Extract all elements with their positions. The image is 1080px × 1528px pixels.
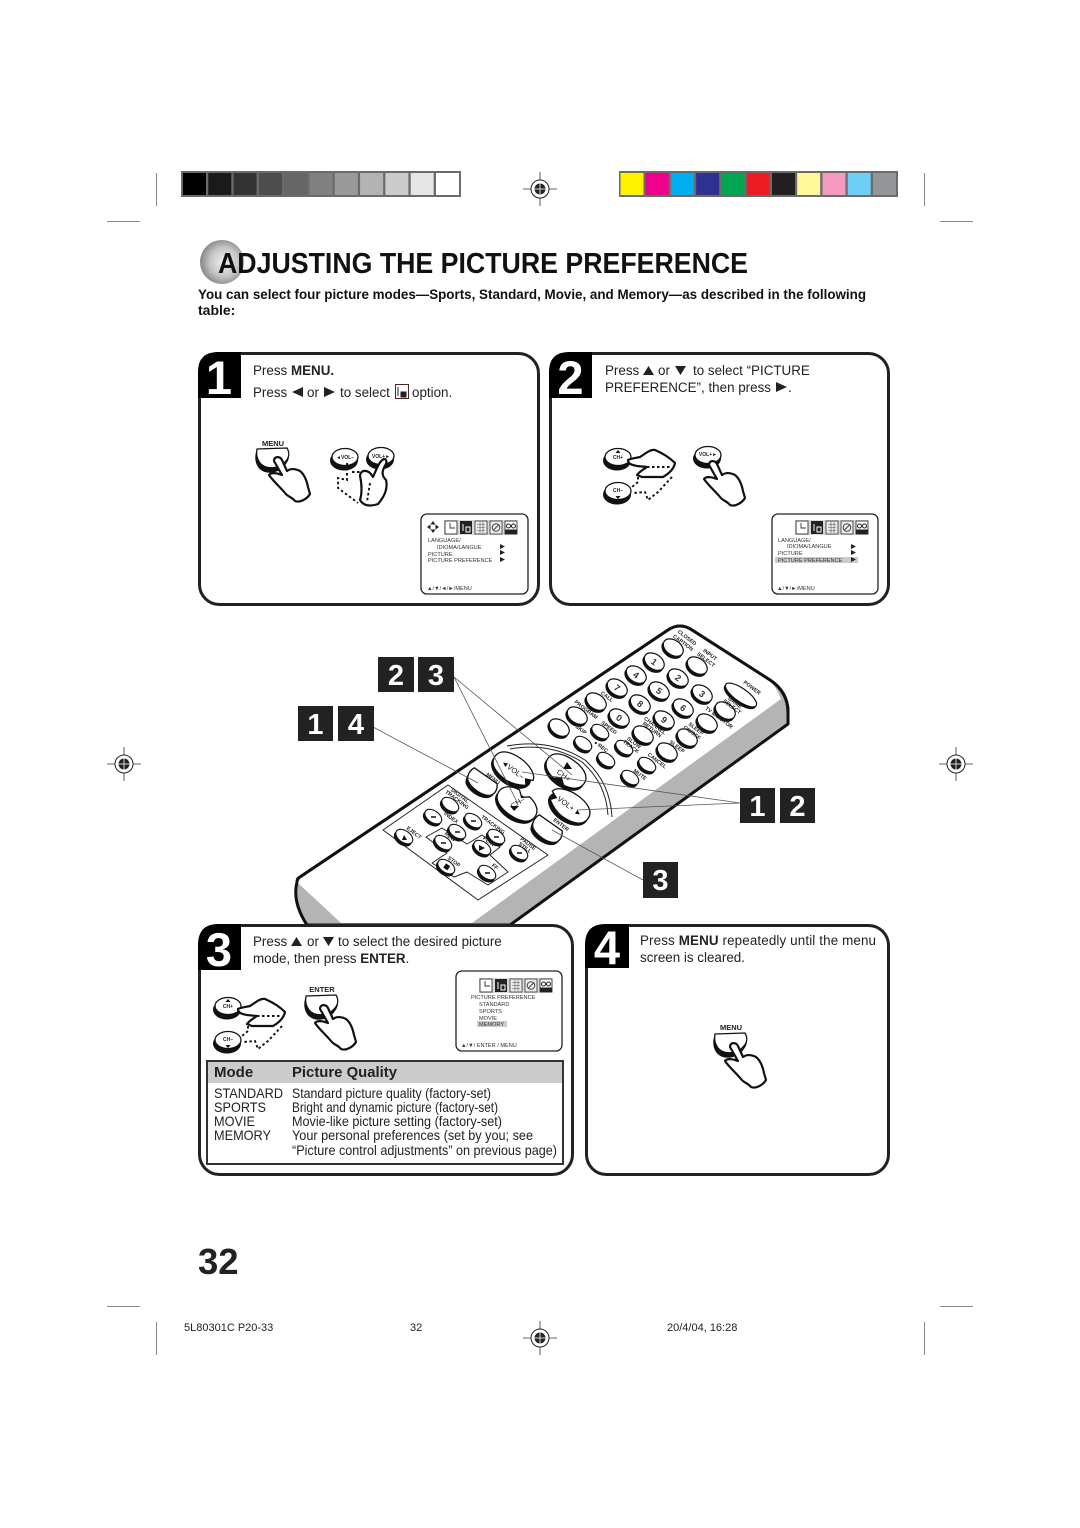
step 1 text: option. [412,385,452,400]
callout: 1 2: 2 [789,791,806,823]
step 3 text: to select the desired picture [338,934,502,949]
step 3 text: or [307,934,319,949]
button labels: TRACKING [480,814,506,836]
panel: step 2 [549,351,888,604]
menu screen 3: MEMORY [479,1022,504,1028]
panel: step 4: 4 [594,921,620,974]
step 2 text: or [658,363,670,378]
step 2 text [605,363,810,395]
button labels: MENU [485,772,501,786]
step 2 text: to select “PICTURE [693,363,810,378]
hand pressing menu: MENU [262,439,284,448]
menu screen 2 [772,514,878,594]
direction buttons: CH– [509,794,527,811]
callout: 2 3 [378,657,454,692]
button labels: STOP [446,855,461,869]
top buttons [544,635,760,791]
button labels: FF [490,863,500,872]
button labels: 8 [635,698,645,710]
menu screen 2: LANGUAGE/ [778,538,811,544]
step 1 text: Press MENU. [253,363,334,378]
panel: step 3: 3 [206,923,232,976]
callout: 3 [643,862,678,898]
step 3 text: mode, then press ENTER. [253,951,409,966]
menu screen 2: PICTURE [778,551,803,557]
button labels: 4 [631,669,641,681]
table: modes: Movie-like picture setting (factory-set) [292,1114,502,1129]
button labels: SLEEP [687,722,705,737]
process colour bar [619,171,898,197]
button labels: CHANNEL [642,716,667,737]
menu screen 1: ▲/▼/◄/►/MENU [427,586,472,592]
direction buttons: CH+ [555,767,573,784]
hand pressing menu: MENU [720,1023,742,1032]
intro text [198,286,866,318]
intro text: table: [198,302,235,318]
direction buttons: ◄VOL– [499,758,527,781]
hand pressing vol+ [693,446,745,506]
button labels: 6 [678,702,688,714]
button labels: SLEEP [668,740,686,755]
menu screen 2: PICTURE PREFERENCE [778,558,843,564]
remote body [296,626,788,925]
button labels: GAME [726,696,743,711]
menu screen 1: IDIOMA/LANGUE [437,545,482,551]
menu screen 1: LANGUAGE/ [428,538,461,544]
table: modes: MEMORY [214,1128,271,1143]
button labels: ● REC [592,740,609,754]
menu screen 2: IDIOMA/LANGUE [787,544,832,550]
menu screen 2: ▲/▼/►/MENU [777,586,815,592]
table: modes: SPORTS [214,1100,266,1115]
button labels: INDEX [442,811,459,826]
hand pressing menu [255,439,310,502]
panel: step 4 [585,921,888,1174]
menu screen 3: ▲/▼/ ENTER / MENU [461,1043,517,1049]
button labels: MUTE [632,768,648,782]
button labels: SPEED [600,720,618,736]
direction buttons: VOL+ ► [555,794,584,819]
menu screen 3: MOVIE [479,1016,497,1022]
footer slug [184,1322,737,1334]
button labels: EJECT [405,826,423,841]
menu screen 3: SPORTS [479,1009,502,1015]
hand pressing vol buttons: VOL+► [372,454,390,460]
button labels: ENTER [552,817,570,833]
button labels: PLAY [481,836,496,849]
step 3 text [253,934,502,966]
callout: 1 4: 1 [307,709,324,741]
table: modes: STANDARD [214,1086,283,1101]
callout: 1 2 [740,788,815,823]
table: modes: Bright and dynamic picture (factory-set) [292,1100,498,1115]
title with sphere [200,240,748,284]
menu screen 1 [421,514,528,594]
table: modes: Mode [214,1064,253,1081]
title with sphere: ADJUSTING THE PICTURE PREFERENCE [218,248,748,280]
button labels: 1 [649,656,659,668]
panel: step 1 [198,351,538,604]
button labels: TV MONITOR [704,706,734,731]
button labels: STILL [517,841,533,855]
hand pressing vol+: VOL+► [699,452,717,458]
button labels: 5 [654,685,664,697]
button labels: REW [443,831,456,843]
button labels: RETURN [641,721,662,739]
footer slug: 5L80301C P20-33 [184,1322,273,1334]
step 1 text: to select [340,385,390,400]
button labels: DIGITAL [449,788,470,805]
hand pressing enter [304,985,356,1050]
button labels: SELECT [721,699,742,716]
step 1 text [253,363,452,400]
button labels: TRACK [621,739,640,755]
callout: 1 4: 4 [348,709,364,741]
callout: 2 3: 3 [428,660,444,692]
page number: 32 [198,1241,239,1282]
button labels: 7 [612,682,622,694]
button labels: CAPTION [671,634,694,653]
button labels: 3 [697,688,707,700]
button labels: ON/OFF [682,725,702,742]
button labels: CANCEL [646,752,668,771]
table: modes [207,1061,563,1164]
callout: 1 2: 1 [749,791,766,823]
step 2 text: Press [605,363,640,378]
button labels: SKIP [574,724,588,737]
button labels: TRACKING [444,789,470,811]
hand pressing enter: ENTER [309,985,335,994]
lower buttons [391,794,531,886]
table: modes: “Picture control adjustments” on previous page) [292,1143,557,1158]
callout: 1 4 [298,706,374,741]
table: modes: Standard picture quality (factory-set) [292,1086,491,1101]
hand pressing vol buttons: ◄VOL– [336,455,354,461]
button labels: POWER [742,680,762,697]
table: modes: MOVIE [214,1114,255,1129]
direction buttons [461,745,596,850]
keypad cluster outline [383,785,548,900]
hand pressing vol buttons [330,448,394,505]
menu screen 3 [456,971,562,1051]
panel: step 1: 1 [206,351,232,404]
registration marks [107,172,973,1355]
step 1 text: Press [253,385,288,400]
menu screen 1: PICTURE PREFERENCE [428,558,493,564]
panel: step 2: 2 [557,351,584,404]
table: modes: Your personal preferences (set by you; see [292,1128,533,1143]
button labels: CALL [599,691,615,704]
step 2 text: PREFERENCE”, then press [605,380,771,395]
button labels: 9 [659,714,669,726]
button labels: PAUSE [519,836,537,852]
step 1 text: or [307,385,319,400]
button labels: 2 [673,672,683,684]
button labels: PROGRAM [573,699,599,721]
panel: step 3 [198,923,572,1174]
hand pressing menu [713,1023,766,1088]
button labels: SELECT [695,652,716,669]
step 4 text: Press MENU repeatedly until the menu [640,933,876,948]
step 3 text: Press [253,934,288,949]
button labels: 0 [614,712,624,724]
callout: 2 3: 2 [388,660,404,692]
menu screen 3: STANDARD [479,1002,509,1008]
intro text: You can select four picture modes—Sports, Standard, Movie, and Memory—as described in the following [198,286,866,302]
step 4 text: screen is cleared. [640,950,745,965]
arcs [507,744,612,817]
footer slug: 32 [410,1322,422,1334]
grayscale colour bar [181,171,461,197]
callout lines [373,677,740,880]
step 2 text: . [788,380,792,395]
callout: 3: 3 [652,865,669,897]
button labels [405,629,762,872]
button labels: INPUT [701,648,718,663]
button labels: SLOW [625,736,642,750]
table: modes: Picture Quality [292,1064,398,1081]
remote control [296,626,788,925]
menu screen 3: PICTURE PREFERENCE [471,995,536,1001]
step 4 text [640,933,876,965]
button labels: CLOSED [676,629,697,647]
footer slug: 20/4/04, 16:28 [667,1322,737,1334]
hand pressing ch buttons [603,448,675,504]
menu screen 1: PICTURE [428,552,453,558]
hand pressing ch buttons [213,998,285,1054]
